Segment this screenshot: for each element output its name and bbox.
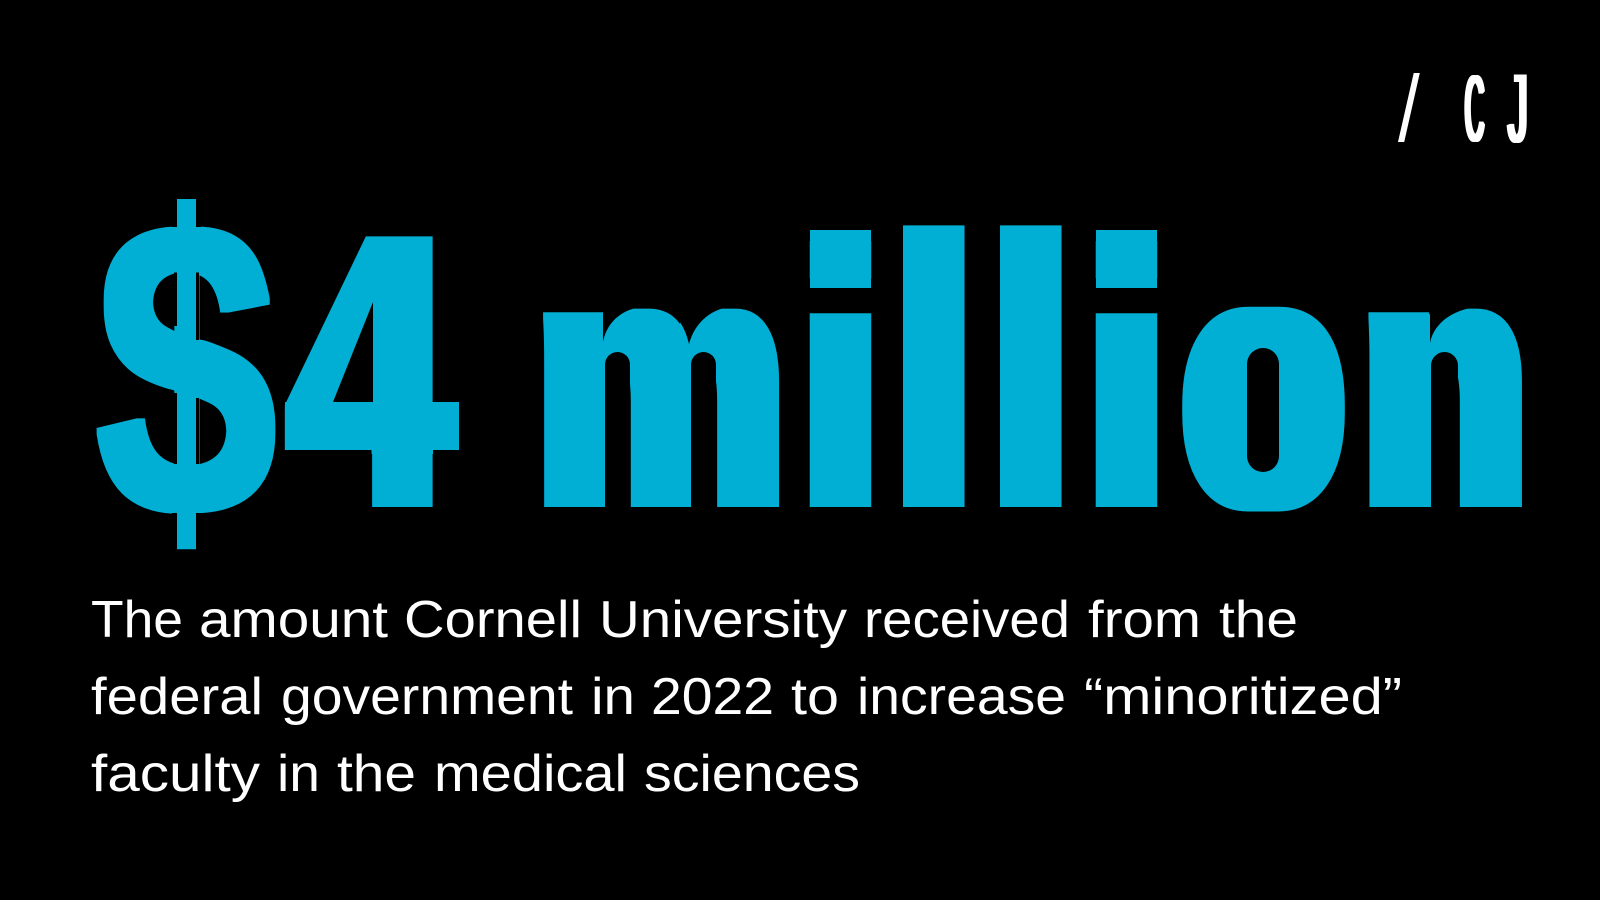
headline figure: $4 million: $ (96, 133, 276, 605)
logo: / CJ: J (1508, 53, 1528, 163)
headline figure: $4 million: l (872, 155, 996, 589)
logo: / CJ (1398, 53, 1528, 163)
description text: sciences (644, 745, 860, 803)
description text: federal (91, 668, 263, 726)
description text: from (1088, 591, 1201, 649)
description text: faculty (91, 745, 260, 803)
description text: University (599, 591, 847, 649)
description text: 2022 (651, 668, 774, 726)
headline figure: $4 million: l (969, 155, 1093, 589)
headline figure: $4 million: m (537, 181, 784, 580)
description text: government (281, 668, 574, 726)
logo: / CJ: C (1465, 55, 1484, 161)
description text: in (591, 668, 635, 726)
logo: / CJ: / (1398, 57, 1421, 162)
description text: The (91, 591, 183, 649)
description text: in (277, 745, 320, 803)
headline figure: $4 million: i (1064, 175, 1189, 585)
description text: amount (199, 591, 389, 649)
headline figure: $4 million: n (1364, 181, 1525, 580)
description text: increase (857, 668, 1066, 726)
description text: to (791, 668, 839, 726)
headline figure: $4 million (96, 133, 1526, 605)
description text: received (864, 591, 1070, 649)
description text: the (1219, 591, 1298, 649)
headline figure: $4 million: 4 (293, 160, 449, 583)
description text: the (337, 745, 416, 803)
description text (91, 591, 1402, 803)
description text: medical (434, 745, 627, 803)
description text: “minoritized” (1084, 668, 1402, 726)
headline figure: $4 million: i (778, 175, 903, 585)
headline figure: $4 million: o (1188, 180, 1340, 581)
description text: Cornell (404, 591, 582, 649)
